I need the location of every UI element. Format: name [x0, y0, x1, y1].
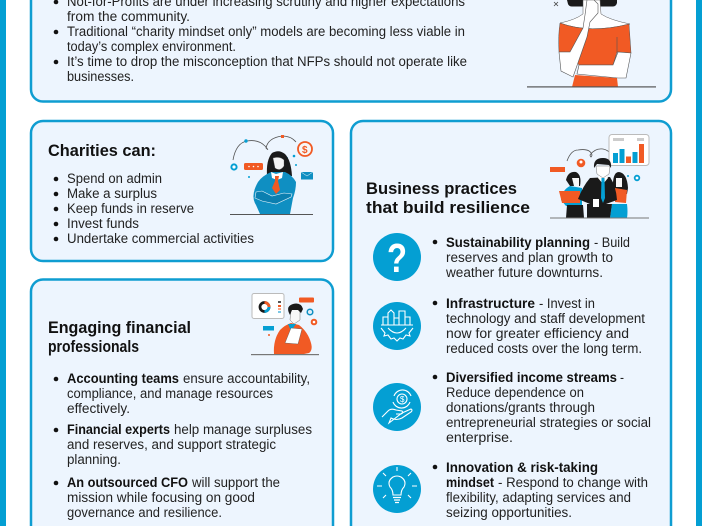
charities bullet list: Undertake commercial activities [67, 231, 254, 246]
panel: engaging financial professionals [31, 280, 333, 526]
item: accounting teams: compliance, and manage resources [67, 386, 273, 401]
charities bullet list: Invest funds [67, 216, 139, 231]
intro bullet list: from the community. [67, 9, 190, 24]
charities bullet list: Spend on admin [67, 171, 162, 186]
intro bullet list: today’s complex environment. [67, 39, 236, 54]
heading: engaging financial professionals: professionals [48, 338, 139, 356]
icon: city on gear [373, 302, 421, 350]
panel: intro [31, 0, 671, 102]
item: outsourced CFO: mission while focusing on good [67, 490, 255, 505]
heading: charities can: Charities can: [48, 142, 156, 160]
item: infrastructure: Infrastructure [446, 296, 535, 311]
item: infrastructure [373, 296, 645, 356]
intro bullet list: businesses. [67, 69, 134, 84]
heading: engaging financial professionals [48, 319, 191, 356]
item: innovation and risk-taking: flexibility, adapting services and [446, 490, 631, 505]
item: diversified income streams: Diversified income streams [446, 370, 617, 385]
item: infrastructure: - Invest in [539, 296, 595, 311]
icon: hand with coin: $ [400, 395, 405, 404]
illustration: business team with chart [550, 134, 649, 218]
item: diversified income streams: donations/grants through [446, 400, 595, 415]
item: sustainability planning: - Build [594, 235, 630, 250]
item: accounting teams: ensure accountability, [183, 371, 310, 386]
item: outsourced CFO: An outsourced CFO [67, 475, 188, 490]
panel: business practices [351, 121, 671, 526]
item: innovation and risk-taking [373, 460, 648, 520]
right page border [696, 0, 702, 526]
item: sustainability planning: reserves and plan growth to [446, 250, 613, 265]
icon: question mark: ? [387, 235, 407, 281]
item: diversified income streams: entrepreneurial strategies or social [446, 415, 651, 430]
item: outsourced CFO: will support the [191, 475, 280, 490]
charities bullet list: Keep funds in reserve [67, 201, 194, 216]
intro bullet list: Traditional “charity mindset only” models are becoming less viable in [67, 24, 465, 39]
item: innovation and risk-taking: - Respond to change with [498, 475, 648, 490]
icon: light bulb [373, 465, 421, 513]
icon: question mark [373, 233, 421, 281]
item: financial experts [54, 422, 312, 467]
item: financial experts: planning. [67, 452, 121, 467]
item: financial experts: Financial experts [67, 422, 170, 437]
intro bullet list [54, 0, 467, 84]
heading: business practices [366, 180, 530, 217]
icon: hand with coin [373, 383, 421, 431]
item: sustainability planning: weather future downturns. [445, 265, 603, 280]
heading: business practices: Business practices [366, 180, 517, 198]
illustration: thinking woman [527, 0, 656, 88]
item: financial experts: help manage surpluses [174, 422, 312, 437]
item: innovation and risk-taking: mindset [446, 475, 495, 490]
illustration: businesswoman with crossed arms: $ [302, 145, 308, 156]
item: sustainability planning [373, 233, 630, 281]
charities bullet list: Make a surplus [67, 186, 157, 201]
item: diversified income streams: Reduce dependence on [446, 385, 584, 400]
item: accounting teams [54, 371, 310, 416]
heading: business practices: that build resilience [366, 199, 530, 217]
item: diversified income streams: - [620, 370, 624, 385]
item: accounting teams: Accounting teams [67, 371, 179, 386]
charities bullet list [54, 171, 254, 246]
item: outsourced CFO [54, 475, 280, 520]
item: infrastructure: technology and staff development [446, 311, 645, 326]
item: innovation and risk-taking: Innovation & risk-taking [446, 460, 598, 475]
item: diversified income streams: enterprise. [446, 430, 513, 445]
item: outsourced CFO: governance and resilience. [67, 505, 222, 520]
item: diversified income streams [373, 370, 651, 445]
item: infrastructure: reduced costs over the long term. [446, 341, 642, 356]
item: sustainability planning: Sustainability planning [446, 235, 590, 250]
panel: charities can [31, 121, 333, 261]
heading: engaging financial professionals: Engaging financial [48, 319, 191, 337]
item: financial experts: and reserves, and support strategic [67, 437, 276, 452]
intro bullet list: It’s time to drop the misconception that NFPs should not operate like [67, 54, 467, 69]
illustration: financial professional with clipboard [251, 294, 319, 355]
item: accounting teams: effectively. [67, 401, 130, 416]
illustration: businesswoman with crossed arms [230, 135, 313, 215]
item: innovation and risk-taking: seizing opportunities. [446, 505, 572, 520]
left page border [0, 0, 6, 526]
item: infrastructure: now for greater efficiency and [446, 326, 629, 341]
